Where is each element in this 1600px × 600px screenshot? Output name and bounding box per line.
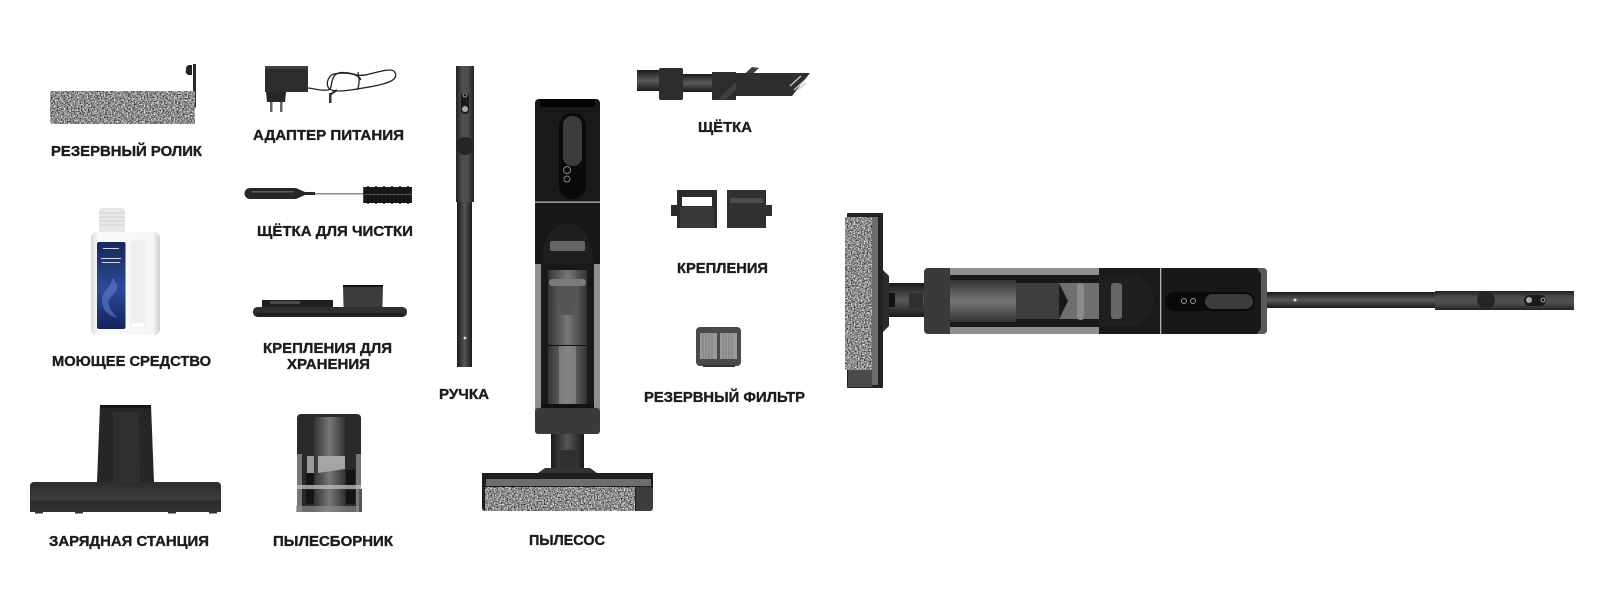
icon: handle <box>456 66 474 367</box>
icon: vacuum, upright <box>482 99 653 511</box>
item: crevice brush <box>637 67 810 136</box>
item: vacuum, horizontal <box>845 213 1574 388</box>
icon: spare roller <box>50 64 196 124</box>
icon: cleaning brush <box>245 186 412 204</box>
label: spare filter: РЕЗЕРВНЫЙ ФИЛЬТР <box>644 388 805 406</box>
neck <box>889 283 924 317</box>
label: crevice brush: ЩЁТКА <box>698 119 753 136</box>
label: spare roller: РЕЗЕРВНЫЙ РОЛИК <box>51 142 202 160</box>
label: mounts: КРЕПЛЕНИЯ <box>677 261 768 277</box>
vacuum tube <box>1267 292 1435 308</box>
label: storage mount: КРЕПЛЕНИЯ ДЛЯ <box>263 341 392 357</box>
item: storage mount <box>253 285 407 373</box>
icon: dust container <box>296 414 362 512</box>
label: vacuum, upright: ПЫЛЕСОС <box>529 533 606 549</box>
icon: storage mount <box>253 285 407 317</box>
label: power adapter: АДАПТЕР ПИТАНИЯ <box>253 128 404 144</box>
icon: crevice brush <box>637 67 810 100</box>
item: spare filter <box>644 327 805 406</box>
icon: charging station <box>30 405 221 514</box>
vacuum handle <box>1435 291 1574 310</box>
label: storage mount: ХРАНЕНИЯ <box>287 357 370 373</box>
item: dust container <box>273 414 393 550</box>
item: handle <box>439 66 490 403</box>
item: detergent bottle <box>52 208 211 370</box>
item: vacuum, upright <box>482 99 653 549</box>
item: mounts <box>671 190 772 277</box>
vacuum body <box>924 268 1267 334</box>
label: cleaning brush: ЩЁТКА ДЛЯ ЧИСТКИ <box>257 223 413 240</box>
icon: spare filter <box>696 327 741 367</box>
label: handle: РУЧКА <box>439 387 490 403</box>
label: detergent bottle: МОЮЩЕЕ СРЕДСТВО <box>52 354 211 370</box>
icon: mounts <box>671 190 772 228</box>
label: charging station: ЗАРЯДНАЯ СТАНЦИЯ <box>49 534 209 550</box>
label: dust container: ПЫЛЕСБОРНИК <box>273 534 393 550</box>
icon: detergent bottle <box>91 208 160 335</box>
item: charging station <box>30 405 221 550</box>
item: cleaning brush <box>245 186 413 240</box>
icon: power adapter <box>265 66 396 112</box>
item: spare roller <box>50 64 202 160</box>
vacuum head <box>845 213 889 388</box>
label: storage mount <box>263 341 392 373</box>
item: power adapter <box>253 66 404 144</box>
